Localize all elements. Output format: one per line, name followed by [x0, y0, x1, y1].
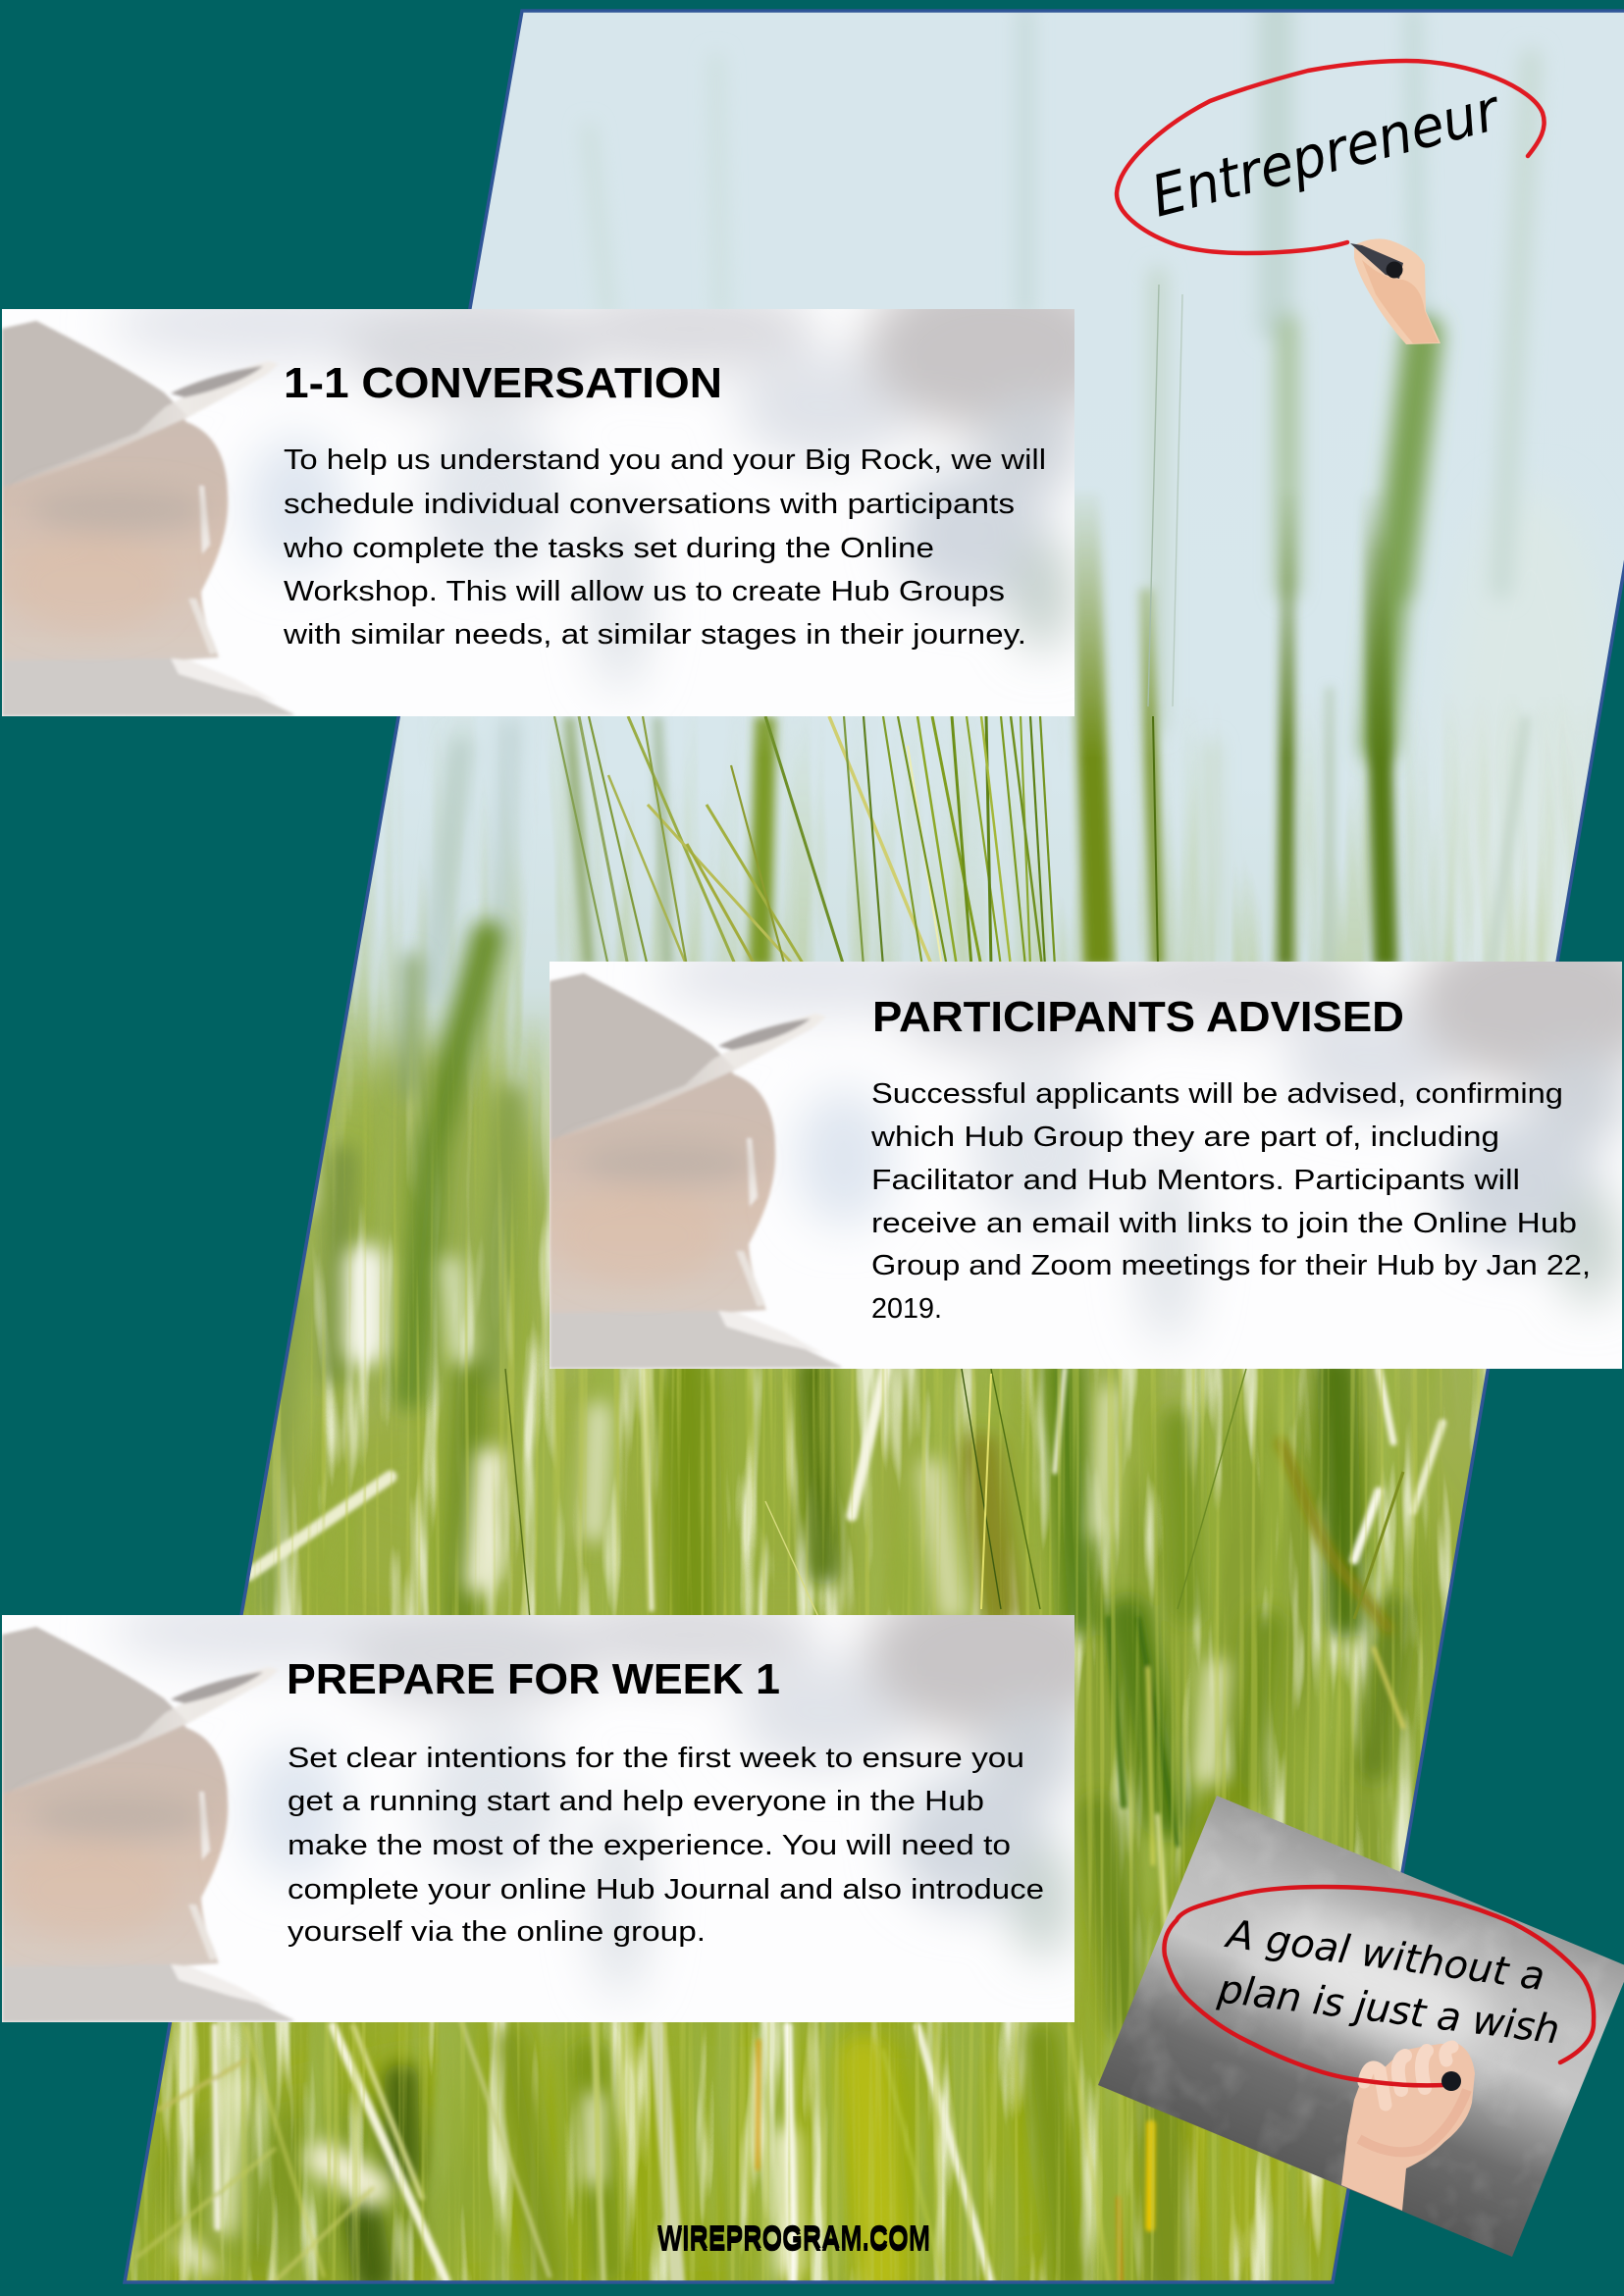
body text: To help us understand you and your Big Rock, we will — [284, 444, 1046, 476]
footer: website: WIREPROGRAM.COM — [657, 2218, 930, 2255]
panel: 1-1 conversation — [2, 265, 1121, 716]
heading: PARTICIPANTS ADVISED — [872, 993, 1404, 1041]
panel background with hat figure — [550, 962, 1622, 1369]
red marker ellipse — [1117, 61, 1545, 253]
body text — [870, 1078, 1591, 1325]
sharp dark bands under panel one — [569, 491, 1526, 966]
body text: receive an email with links to join the Online Hub — [871, 1208, 1577, 1239]
red marker ellipse — [1164, 1887, 1594, 2085]
body text: Facilitator and Hub Mentors. Participants will — [871, 1165, 1520, 1196]
panel background with hat figure — [2, 1615, 1074, 2022]
icon: entrepreneur circled word with hand — [1117, 61, 1545, 344]
body text — [283, 444, 1046, 651]
broad tone areas — [157, 872, 1566, 2280]
body text: complete your online Hub Journal and also introduce — [288, 1874, 1044, 1905]
body text: Set clear intentions for the first week to ensure you — [288, 1743, 1024, 1774]
body text: Workshop. This will allow us to create Hub Groups — [284, 576, 1005, 607]
thin dark detail strands — [131, 1068, 1480, 2280]
soft sky streaks — [432, 11, 1531, 991]
panel: prepare for week 1 — [2, 1571, 1121, 2022]
word: Entrepreneur: Entrepreneur — [1144, 76, 1508, 231]
body text: Successful applicants will be advised, confirming — [871, 1078, 1563, 1110]
panel background with hat figure — [2, 309, 1074, 716]
body text: 2019. — [871, 1293, 942, 1325]
hand holding marker — [1341, 2044, 1475, 2211]
body text: which Hub Group they are part of, including — [870, 1122, 1499, 1153]
heading: PREPARE FOR WEEK 1 — [287, 1655, 780, 1703]
footer: website: WIREPROGRAM.COM — [657, 2221, 930, 2258]
body text: yourself via the online group. — [288, 1916, 706, 1948]
crisp white and yellow blades — [137, 1369, 1442, 2282]
hand holding marker — [1350, 238, 1441, 344]
body text: get a running start and help everyone in the Hub — [288, 1786, 984, 1817]
pale and white blurred blobs — [186, 1119, 1217, 2267]
body text: Group and Zoom meetings for their Hub by Jan 22, — [871, 1250, 1591, 1281]
image: goal without a plan sign — [1089, 1786, 1624, 2267]
marker tip — [1441, 2071, 1461, 2091]
heading: 1-1 CONVERSATION — [284, 359, 722, 407]
thin slanted blades under panel one — [554, 716, 1158, 966]
green blurred left blades — [265, 937, 1393, 2276]
golden curved blade — [1281, 1442, 1388, 1629]
body text: with similar needs, at similar stages in their journey. — [283, 619, 1026, 651]
body text: who complete the tasks set during the Online — [283, 533, 934, 564]
body text — [288, 1743, 1044, 1948]
panel: participants advised — [550, 917, 1624, 1369]
body text: schedule individual conversations with participants — [284, 489, 1015, 520]
sign text line 2: plan is just a wish — [1215, 1966, 1562, 2054]
sign text line 1: A goal without a — [1222, 1911, 1547, 2000]
body text: make the most of the experience. You will need to — [288, 1830, 1011, 1861]
